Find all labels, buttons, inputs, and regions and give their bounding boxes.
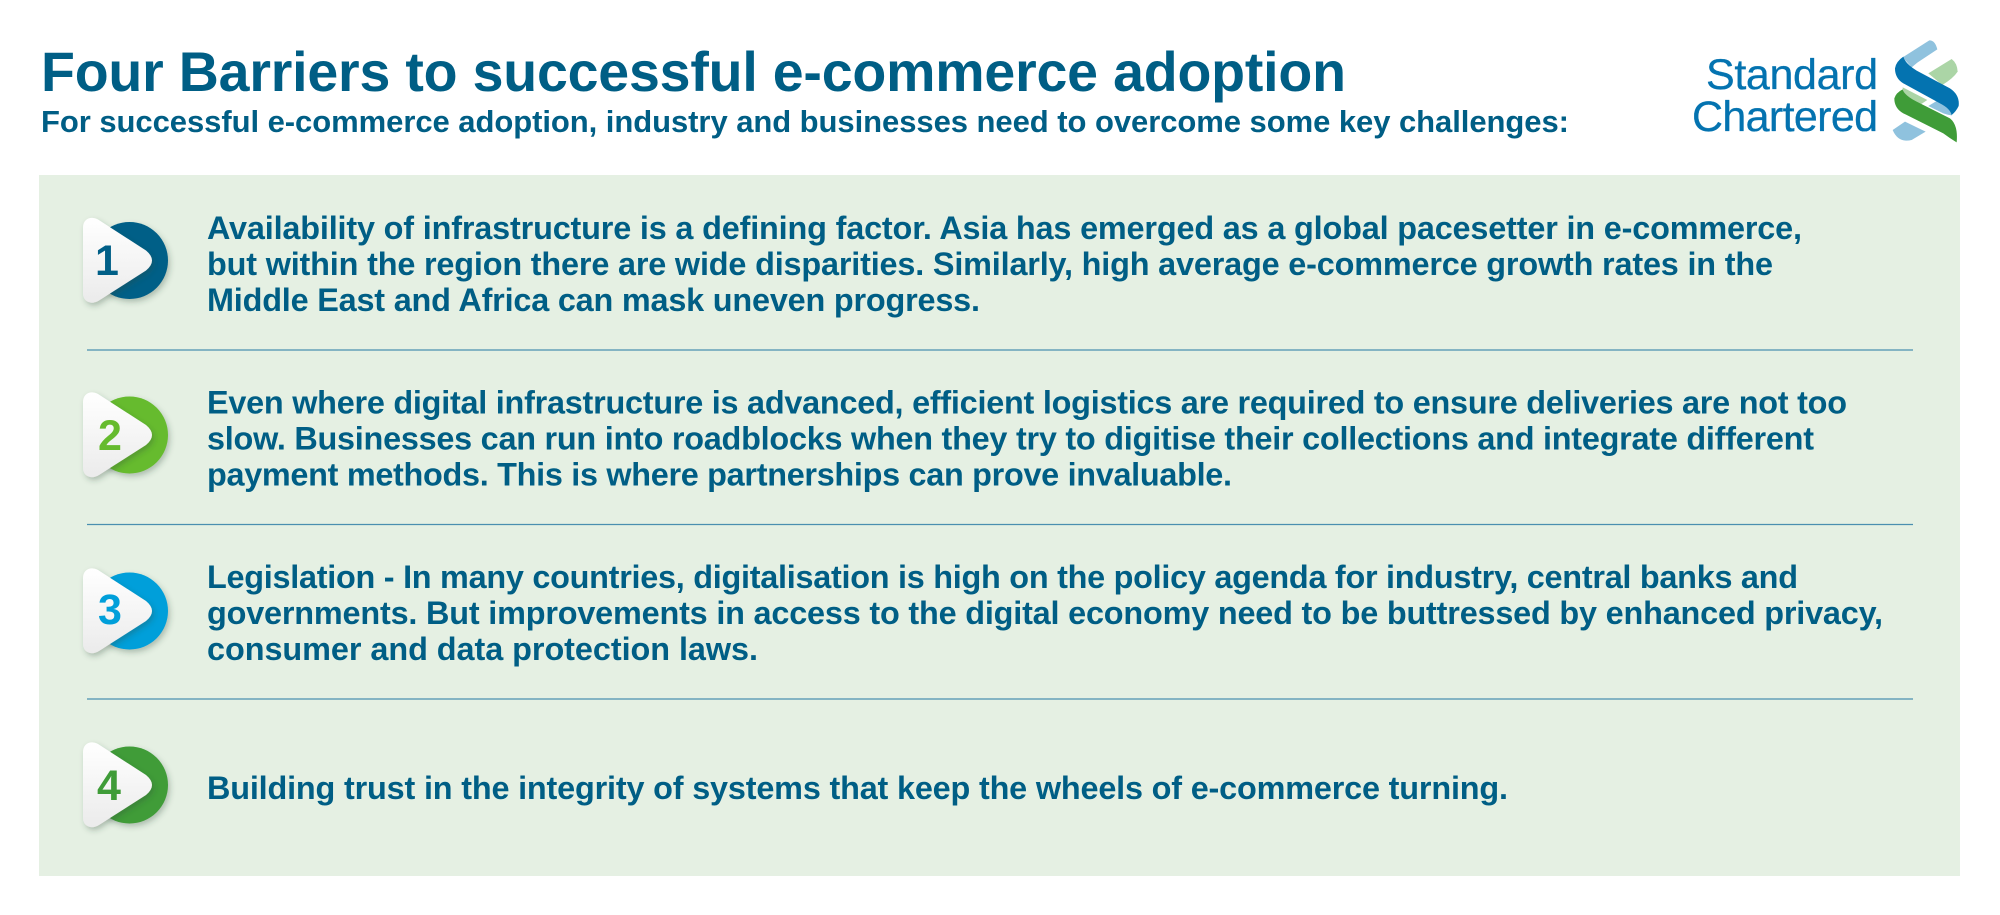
text: legislation: consumer and data protection laws. (207, 631, 758, 667)
text: legislation (207, 559, 1883, 667)
text: infrastructure: but within the region there are wide disparities. Similarly, high average e-commerce growth rates in the (207, 246, 1773, 282)
panel: barriers background (39, 175, 1960, 876)
subtitle: For successful e-commerce adoption, industry and businesses need to overcome some key challenges: (41, 104, 1569, 139)
text: logistics: slow. Businesses can run into roadblocks when they try to digitise their collections and integrate different (207, 420, 1814, 456)
barrier 2 (83, 384, 1847, 492)
icon: number 1 (83, 218, 168, 303)
text: infrastructure (207, 210, 1802, 318)
barrier 1 (83, 210, 1802, 318)
logo wordmark: Chartered (1692, 93, 1878, 141)
text: infrastructure: Availability of infrastructure is a defining factor. Asia has emerged as a global pacesetter in e-commerce, (207, 210, 1802, 246)
icon: number 4 (83, 742, 168, 827)
barrier 3 (83, 559, 1883, 667)
barrier 4 (83, 742, 1508, 827)
text: legislation: Legislation - In many countries, digitalisation is high on the policy agenda for industry, central banks and (207, 559, 1798, 595)
logo: Standard Chartered (1692, 40, 1959, 142)
icon: number 2 (83, 392, 168, 477)
icon: number 4: 4 (97, 762, 121, 810)
logo wordmark: Standard (1706, 51, 1878, 99)
text: logistics: payment methods. This is where partnerships can prove invaluable. (207, 456, 1232, 492)
logo symbol (1893, 40, 1959, 142)
logo wordmark (1692, 51, 1878, 141)
icon: number 3: 3 (98, 586, 122, 634)
icon: number 3 (83, 568, 168, 653)
text: infrastructure: Middle East and Africa can mask uneven progress. (207, 282, 980, 318)
text: trust: Building trust in the integrity of systems that keep the wheels of e-commerce turning. (207, 770, 1508, 806)
text: logistics (207, 384, 1847, 492)
icon: number 2: 2 (98, 412, 122, 460)
text: logistics: Even where digital infrastructure is advanced, efficient logistics are required to ensure deliveries are not too (207, 384, 1847, 420)
title: Four Barriers to successful e-commerce adoption (41, 41, 1346, 103)
icon: number 1: 1 (95, 237, 119, 285)
text: legislation: governments. But improvements in access to the digital economy need to be buttressed by enhanced privacy, (207, 595, 1883, 631)
